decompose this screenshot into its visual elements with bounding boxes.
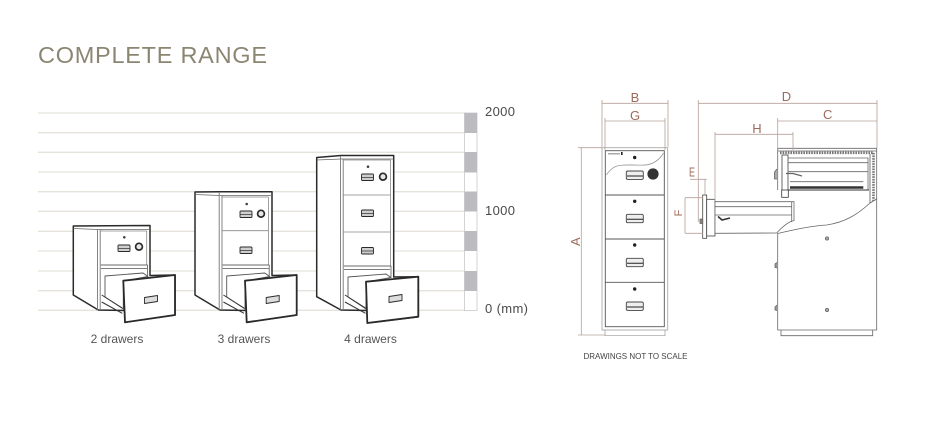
- dimension labels: F: [673, 209, 685, 216]
- dimension labels: A: [568, 237, 583, 246]
- dimension lines: [578, 100, 877, 335]
- cabinet labels: [91, 332, 397, 346]
- dimension labels: H: [752, 121, 762, 136]
- dimension labels: E: [689, 164, 695, 180]
- title: COMPLETE RANGE: [38, 42, 267, 68]
- cabinet labels: 4 drawers: [344, 332, 397, 346]
- height chart gridlines: [38, 113, 465, 310]
- drawings note: DRAWINGS NOT TO SCALE: [584, 351, 688, 361]
- side section drawing: [700, 148, 877, 336]
- scale labels: 1000: [485, 203, 515, 218]
- cabinet labels: 3 drawers: [218, 332, 270, 346]
- dimension labels: [568, 89, 832, 246]
- cabinet: 2 drawers: [73, 226, 175, 322]
- height scale bar: [464, 113, 477, 310]
- cabinet: 4 drawers: [317, 156, 418, 323]
- scale labels: 0 (mm): [485, 301, 528, 316]
- front elevation drawing: [602, 148, 668, 336]
- dimension labels: D: [782, 89, 791, 104]
- cabinet labels: 2 drawers: [91, 332, 143, 346]
- dimension labels: C: [823, 107, 832, 122]
- scale labels: [485, 104, 528, 316]
- dimension labels: G: [630, 108, 640, 123]
- dimension labels: B: [631, 90, 639, 105]
- scale labels: 2000: [485, 104, 515, 119]
- cabinet: 3 drawers: [195, 192, 297, 322]
